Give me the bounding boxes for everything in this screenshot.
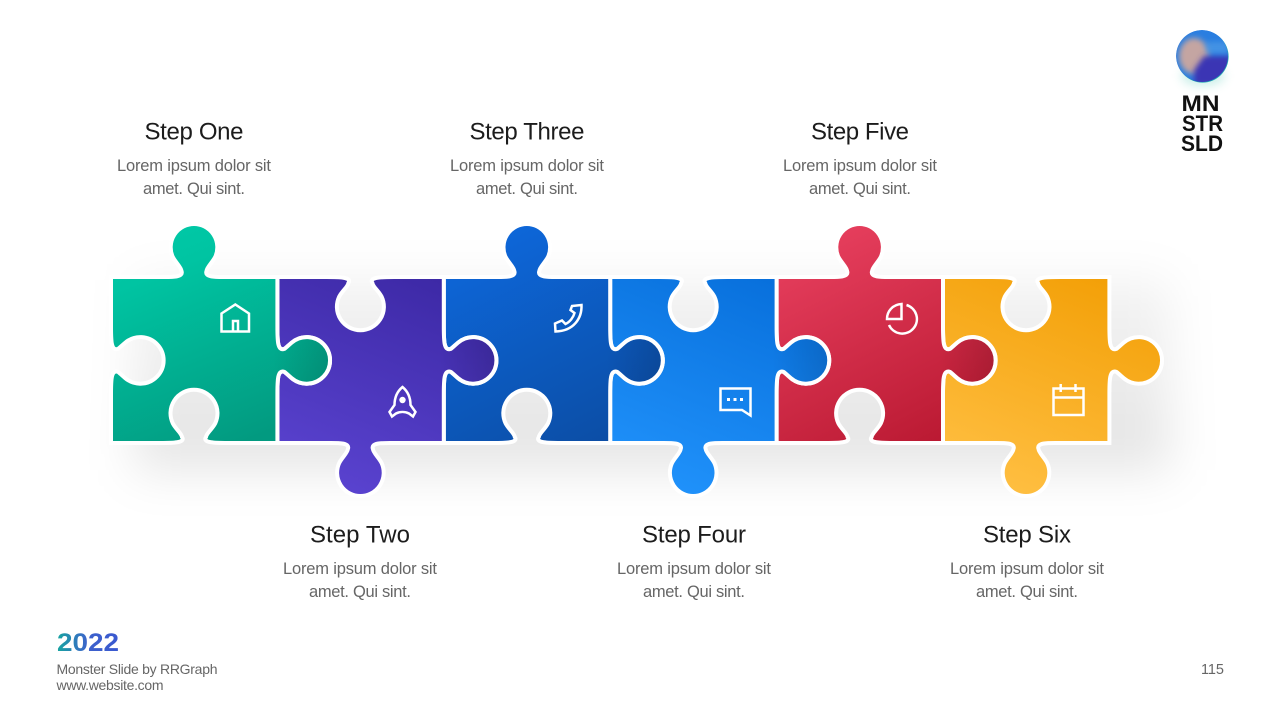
icon: house [222, 304, 249, 332]
text block: step one [117, 118, 271, 198]
text block: step two: Lorem ipsum dolor sit [283, 560, 437, 578]
text block: step four: amet. Qui sint. [643, 583, 745, 601]
text block: step four: Step Four [642, 522, 746, 548]
logo: wordmark: MN [1182, 91, 1220, 116]
text block: step three: Step Three [470, 118, 584, 146]
text block: step three: Lorem ipsum dolor sit [450, 157, 604, 175]
text block: step three [450, 118, 604, 198]
text block: step one: Lorem ipsum dolor sit [117, 157, 271, 175]
text block: step five: amet. Qui sint. [809, 180, 911, 198]
text block: step six: Step Six [983, 522, 1071, 548]
puzzle chain [111, 224, 1162, 496]
puzzle piece three [444, 224, 663, 443]
text block: step two [283, 522, 437, 601]
text block: step five: Lorem ipsum dolor sit [783, 157, 937, 175]
puzzle piece four [610, 277, 829, 496]
text block: step two: Step Two [310, 522, 410, 548]
icon: pie chart [887, 304, 917, 334]
icon: calendar [1054, 384, 1084, 415]
logo: gradient sphere [1176, 30, 1232, 86]
text block: step five: Step Five [811, 118, 909, 146]
logo: wordmark [1181, 91, 1223, 156]
text block: step four [617, 522, 771, 601]
footer: credits: www.website.com [56, 677, 164, 693]
puzzle piece five [777, 224, 996, 443]
page number: 115 [1201, 662, 1224, 678]
text block: step three: amet. Qui sint. [476, 180, 578, 198]
icon: phone [555, 305, 582, 332]
icon: rocket [390, 387, 416, 416]
text block: step one: Step One [144, 118, 244, 146]
icon: chat bubble [720, 388, 750, 416]
text block: step six [950, 522, 1104, 601]
puzzle soft shadow [135, 280, 1170, 470]
text block: step six: amet. Qui sint. [976, 583, 1078, 601]
text block: step two: amet. Qui sint. [309, 583, 411, 601]
footer: year: 2022 [57, 629, 119, 657]
text block: step four: Lorem ipsum dolor sit [617, 560, 771, 578]
puzzle piece one [111, 224, 330, 443]
puzzle piece six [943, 277, 1162, 496]
text block: step five [783, 118, 937, 198]
text block: step six: Lorem ipsum dolor sit [950, 560, 1104, 578]
footer: credits: Monster Slide by RRGraph [56, 661, 218, 677]
logo: wordmark: SLD [1181, 131, 1223, 156]
logo: wordmark: STR [1182, 111, 1223, 136]
puzzle piece two [277, 277, 496, 496]
footer: credits [56, 661, 218, 693]
text block: step one: amet. Qui sint. [143, 180, 245, 198]
